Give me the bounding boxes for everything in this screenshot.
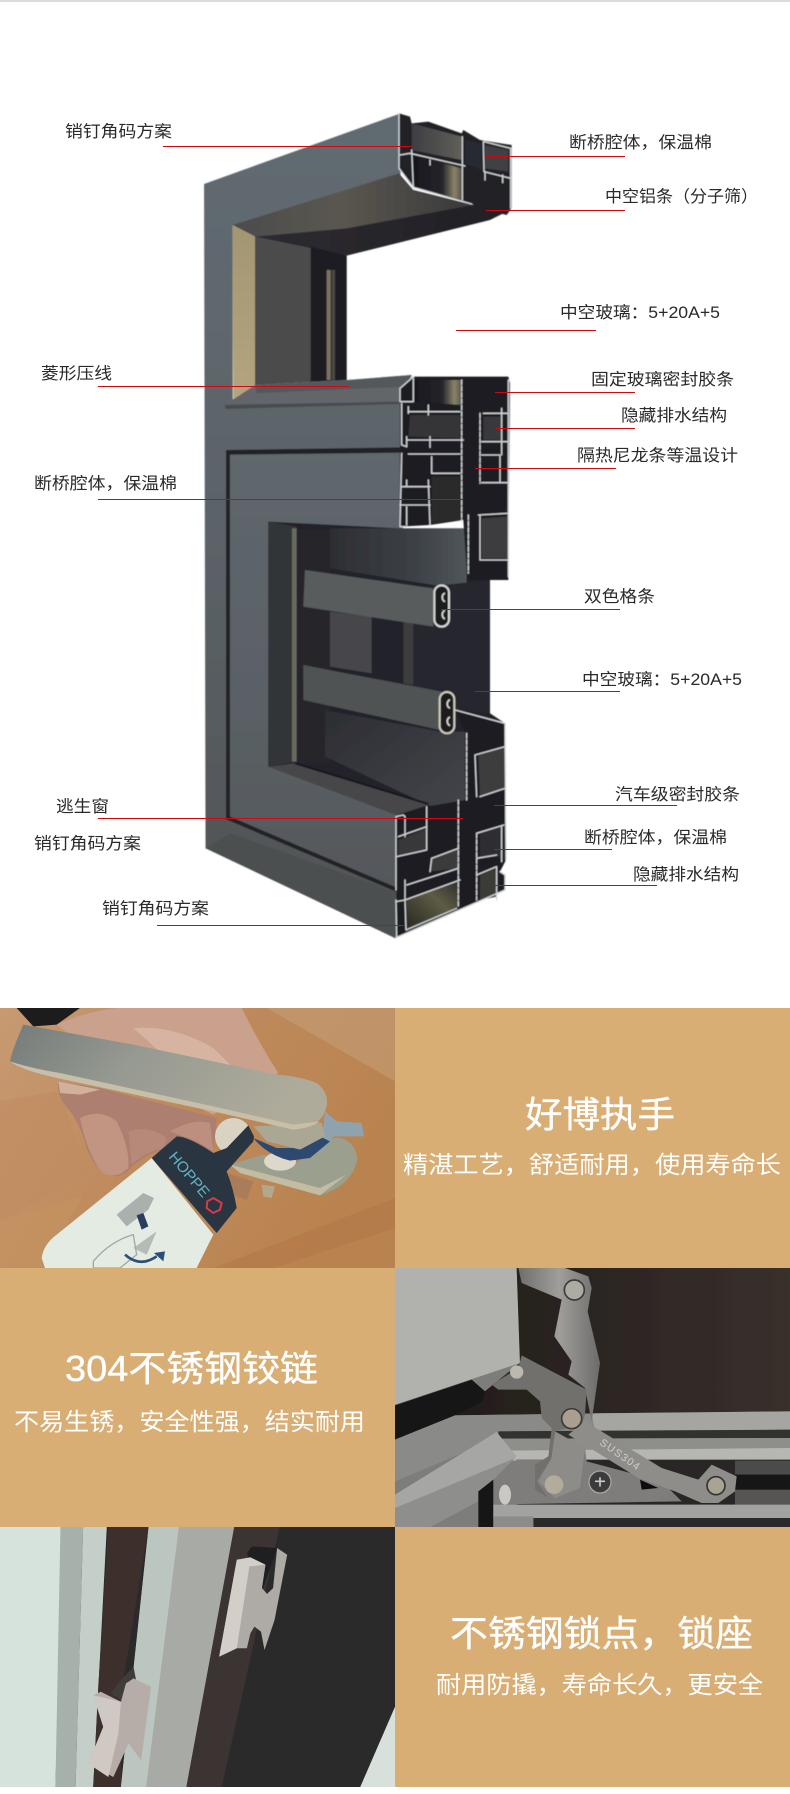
label: fixed glass seal: 固定玻璃密封胶条 — [591, 370, 734, 389]
label: hidden drainage lower: 隐藏排水结构 — [633, 865, 739, 884]
top grey bar — [0, 0, 790, 2]
panel: 304 hinge photo — [395, 1268, 790, 1528]
panel: lock point text — [395, 1527, 790, 1787]
rivets and screw — [564, 1280, 584, 1300]
spindle washer — [215, 1118, 252, 1155]
panel: 304 hinge text — [0, 1268, 395, 1527]
neck — [253, 1123, 325, 1150]
frame and sash front faces — [204, 113, 403, 938]
label: escape window: 逃生窗 — [56, 797, 109, 816]
body: lock point: 耐用防撬，寿命长久，更安全 — [436, 1672, 763, 1699]
wood grain — [0, 1091, 87, 1221]
sleeve — [17, 1008, 80, 1026]
heading: Hoppe handle: 好博执手 — [525, 1094, 675, 1135]
palm — [57, 1008, 278, 1115]
muntin end caps — [434, 585, 449, 627]
callout labels with red leader lines — [34, 122, 758, 926]
strap — [253, 1136, 330, 1161]
tag pictogram — [117, 1193, 154, 1226]
label: thermal break left: 断桥腔体，保温棉 — [34, 474, 177, 493]
panel: Hoppe handle photo — [0, 1008, 395, 1268]
hinge long arm — [568, 1421, 737, 1503]
sash face and opening — [226, 447, 508, 893]
heading: lock point: 不锈钢锁点，锁座 — [450, 1613, 753, 1654]
label: diamond bead: 菱形压线 — [41, 364, 112, 383]
hinge stamp text: SUS304 — [597, 1437, 642, 1473]
hinge middle arm — [492, 1355, 587, 1498]
middle section cross-section — [400, 377, 510, 580]
window profile cross-section illustration — [204, 113, 512, 938]
body: Hoppe handle: 精湛工艺，舒适耐用，使用寿命长 — [403, 1152, 781, 1179]
bottom sash and frame cross-section — [396, 710, 506, 937]
panel: lock point photo — [0, 1527, 395, 1787]
label: insulated glass lower: 中空玻璃：5+20A+5 — [582, 670, 742, 689]
heading: 304 hinge: 304不锈钢铰链 — [65, 1348, 318, 1389]
label: pin corner middle: 销钉角码方案 — [34, 834, 142, 853]
label: two-colour muntin: 双色格条 — [584, 587, 655, 606]
upper lock keep — [219, 1548, 287, 1657]
base plate — [230, 1138, 357, 1195]
brand text on tag: HOPPE — [165, 1149, 213, 1201]
fingers — [58, 1081, 217, 1176]
label: insulated glass upper: 中空玻璃：5+20A+5 — [560, 303, 720, 322]
label: pin corner bottom: 销钉角码方案 — [102, 899, 210, 918]
hinge top arm — [518, 1268, 600, 1421]
label: thermal break lower: 断桥腔体，保温棉 — [584, 828, 727, 847]
hinge base plate — [493, 1448, 682, 1505]
label: hidden drainage upper: 隐藏排水结构 — [621, 406, 727, 425]
panel: Hoppe handle text — [395, 1008, 790, 1268]
label: thermal break top: 断桥腔体，保温棉 — [569, 133, 712, 152]
tab — [320, 1111, 364, 1155]
label: pin corner top: 销钉角码方案 — [65, 122, 173, 141]
lower frame strip — [206, 833, 398, 938]
label: nylon strip: 隔热尼龙条等温设计 — [577, 446, 738, 465]
label: hollow aluminium strip: 中空铝条（分子筛） — [605, 187, 758, 206]
hang tag — [152, 1125, 254, 1233]
lower lock point — [88, 1678, 151, 1777]
label: automotive seal: 汽车级密封胶条 — [615, 785, 740, 804]
top opening of frame — [225, 173, 510, 409]
handle lever — [10, 1025, 327, 1130]
top frame cross-section — [399, 113, 512, 215]
body: 304 hinge: 不易生锈，安全性强，结实耐用 — [14, 1409, 365, 1436]
